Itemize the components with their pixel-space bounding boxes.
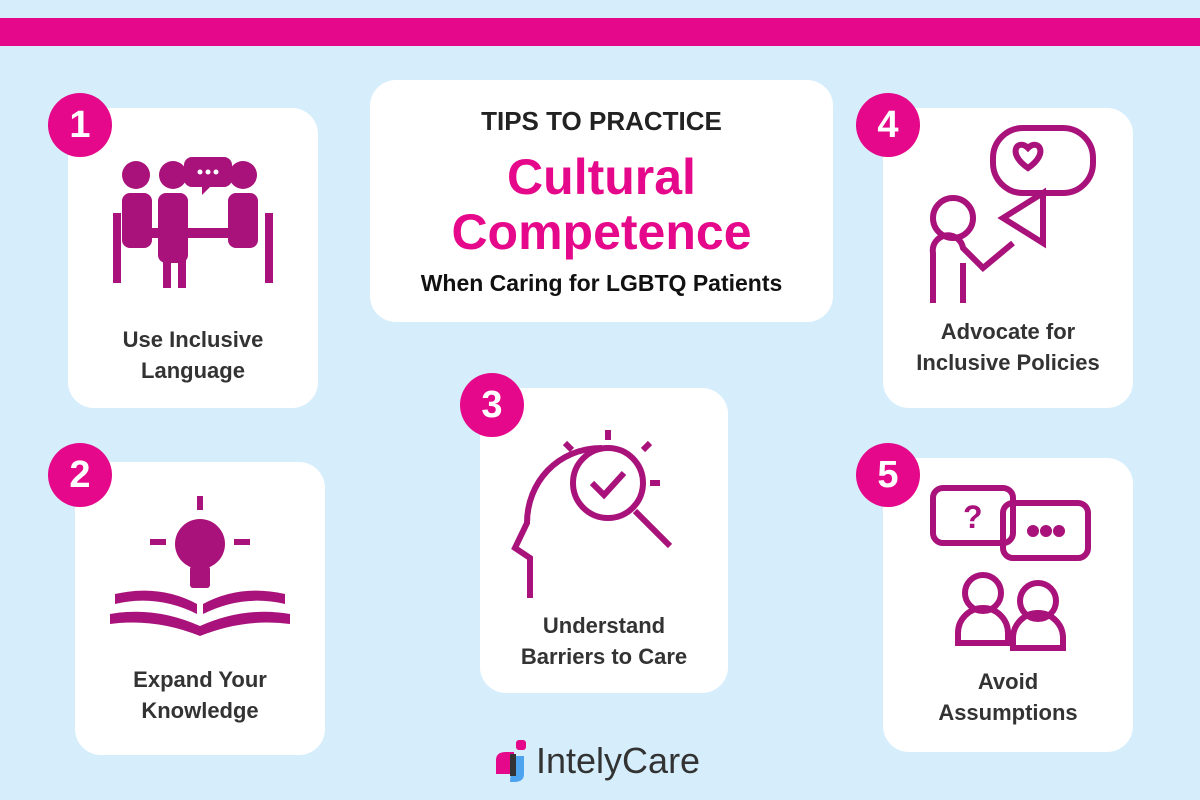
logo: IntelyCare <box>536 740 700 781</box>
subheading: When Caring for LGBTQ Patients <box>421 270 782 296</box>
heading: cultural competence: Competence <box>451 204 752 260</box>
text: use inclusive language: Use Inclusive <box>123 327 263 352</box>
text <box>133 667 267 723</box>
badge 2 <box>48 443 112 507</box>
panel: tip 4 <box>883 108 1133 408</box>
icon: book and lightbulb <box>110 496 290 636</box>
text: Barriers to Care <box>521 644 687 669</box>
badge 5: 5 <box>877 454 899 496</box>
panel: tip 3 <box>480 388 728 693</box>
text: Avoid <box>978 669 1038 694</box>
text: Inclusive Policies <box>916 350 1100 375</box>
text <box>938 669 1078 725</box>
icon: head with magnifier <box>511 430 672 598</box>
panel: title <box>370 80 833 322</box>
heading: tips to practice: TIPS TO PRACTICE <box>481 106 722 136</box>
panel: tip 1 <box>68 108 318 408</box>
icon: meeting table <box>113 157 273 288</box>
text <box>521 613 687 669</box>
panel: tip 5 <box>883 458 1133 752</box>
text: use inclusive language: Language <box>141 358 245 383</box>
badge 2: 2 <box>69 454 91 496</box>
text: Advocate for <box>941 319 1075 344</box>
text: Assumptions <box>938 700 1078 725</box>
text: Understand <box>543 613 665 638</box>
icon: advocate megaphone <box>930 125 1096 303</box>
text <box>916 319 1100 375</box>
panel: tip 2 <box>75 462 325 755</box>
badge 1: 1 <box>69 104 91 146</box>
text: Knowledge <box>141 698 259 723</box>
heading: cultural competence <box>451 149 752 260</box>
badge 3 <box>460 373 524 437</box>
heading: cultural competence: Cultural <box>507 149 696 205</box>
icon: speech bubbles and people <box>930 485 1091 651</box>
badge 3: 3 <box>481 384 503 426</box>
badge 1 <box>48 93 112 157</box>
text: Expand Your <box>133 667 267 692</box>
text: use inclusive language <box>123 327 263 383</box>
badge 4 <box>856 93 920 157</box>
badge 5 <box>856 443 920 507</box>
icon: speech bubbles and people: ? <box>963 499 983 535</box>
badge 4: 4 <box>877 104 899 146</box>
